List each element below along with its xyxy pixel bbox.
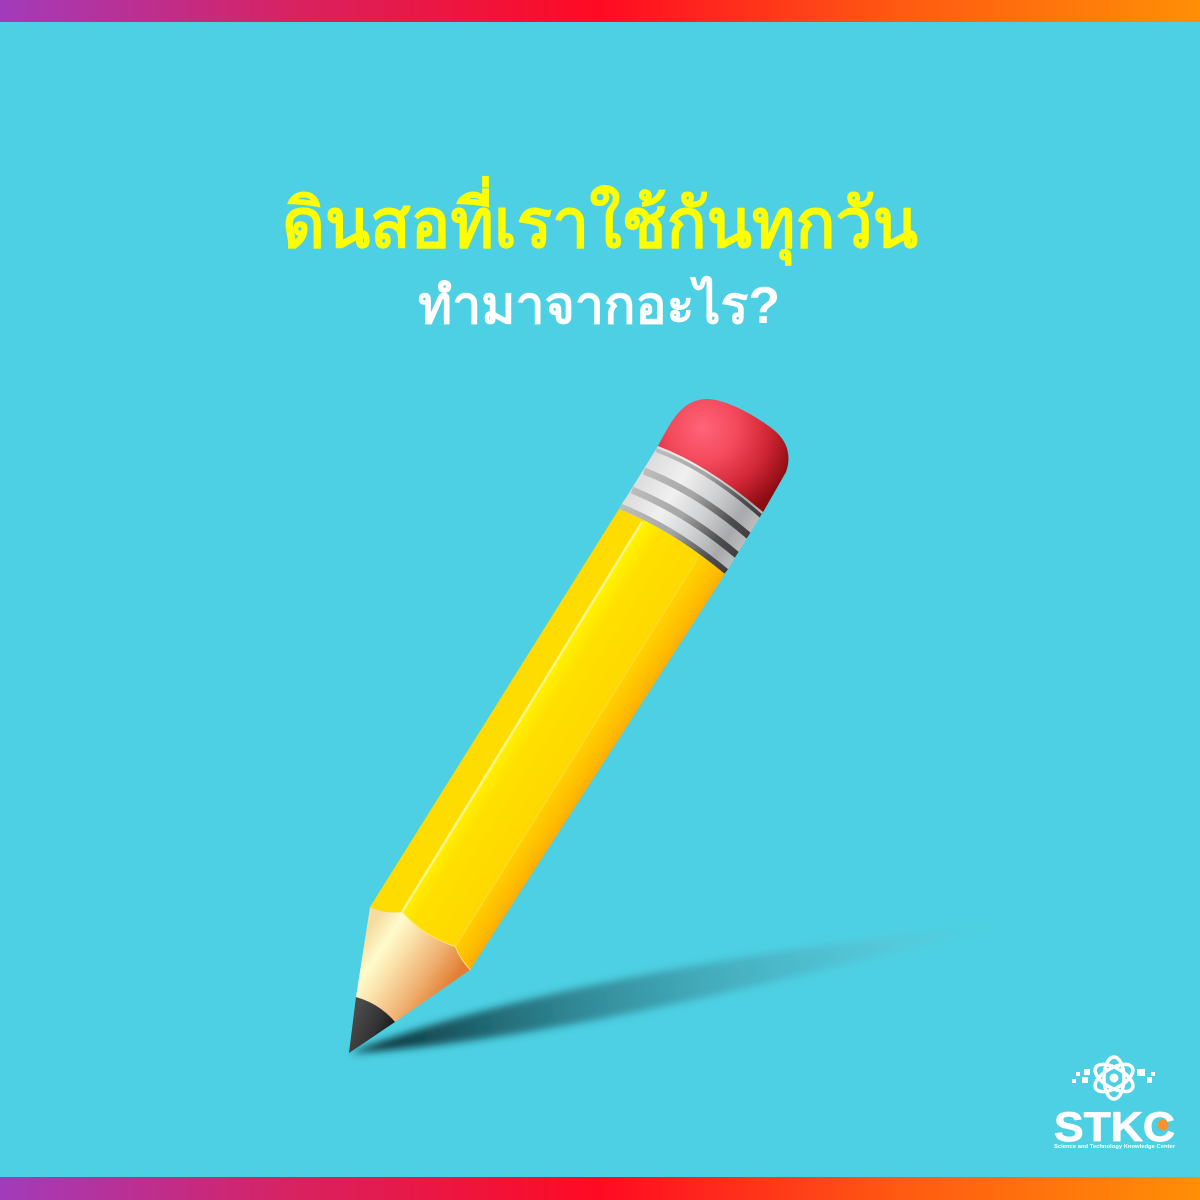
- eraser: [658, 399, 788, 520]
- logo pixel squares: [1072, 1069, 1155, 1083]
- wood tip: [356, 907, 470, 1022]
- pencil illustration: [349, 399, 788, 1053]
- logo tagline: Science and Technology Knowledge Center: [1054, 1144, 1176, 1150]
- logo orange dot: [1158, 1120, 1168, 1130]
- top gradient bar: [0, 0, 1200, 22]
- STKC logo: [1054, 1057, 1176, 1150]
- logo atom icon: [1091, 1057, 1137, 1099]
- pencil body: [370, 500, 730, 970]
- subtitle: ทำมาจากอะไร?: [418, 275, 780, 335]
- bottom gradient bar: [0, 1177, 1200, 1200]
- logo wordmark: STKC: [1054, 1103, 1175, 1150]
- metal ferrule: [619, 446, 763, 574]
- title: ดินสอที่เราใช้กันทุกวัน: [282, 175, 918, 266]
- pencil shadow: [350, 925, 1005, 1053]
- pencil lead: [349, 997, 395, 1053]
